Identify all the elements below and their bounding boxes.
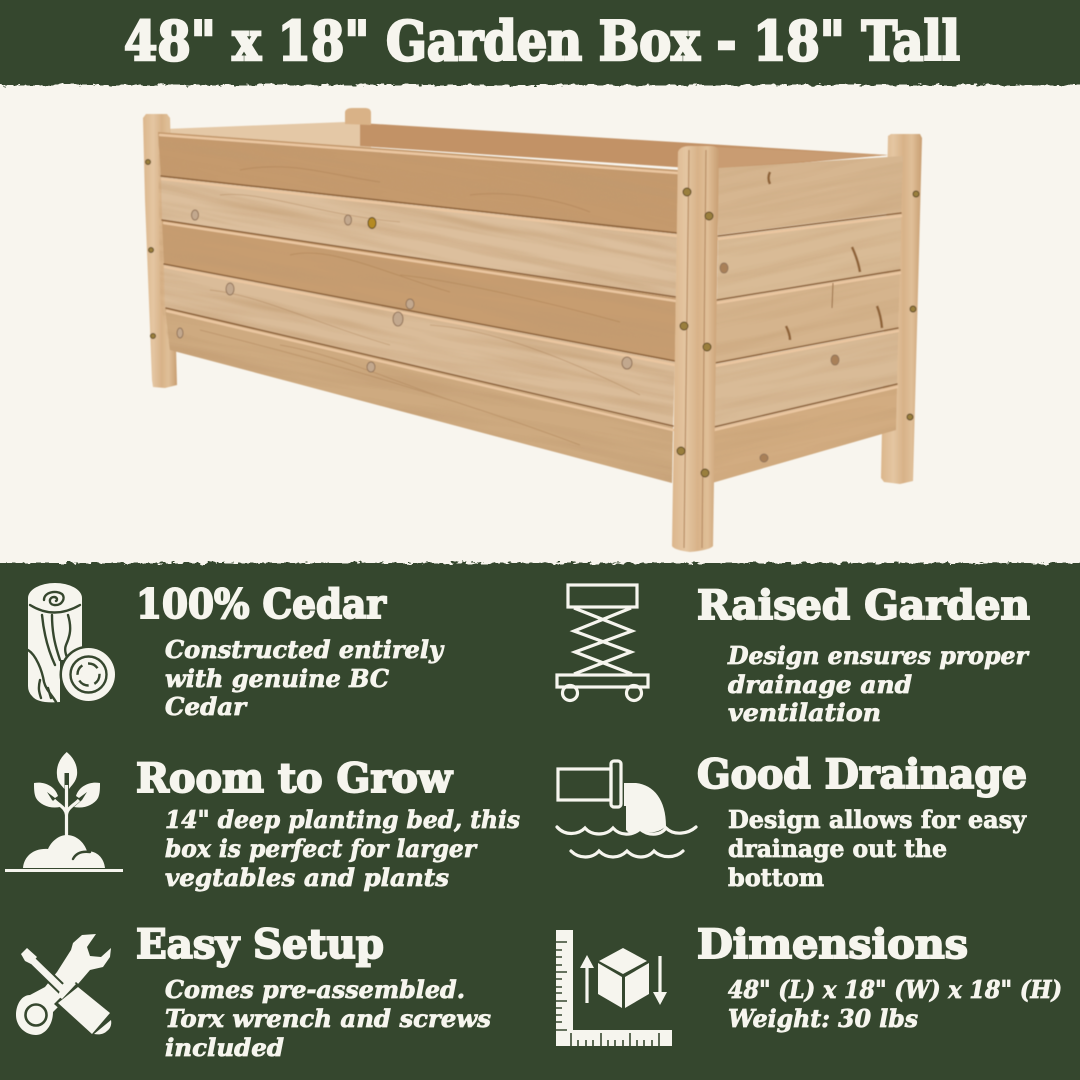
board seam (832, 283, 833, 308)
text: dimensions and weight: Weight: 30 lbs (728, 1004, 918, 1033)
knots: dark streaks (768, 172, 882, 340)
text: cedar description: Constructed entirely (165, 635, 445, 664)
panel: header band (0, 0, 1080, 85)
photo: cedar planter box (142, 107, 923, 552)
text: cedar description (165, 635, 445, 721)
text: room to grow description (165, 805, 520, 892)
text: drainage description: drainage out the (728, 834, 947, 863)
text: dimensions and weight: 48" (L) x 18" (W) x 18" (H) (728, 975, 1062, 1004)
text: dimensions and weight (728, 975, 1062, 1033)
board edges (160, 135, 901, 430)
heading: Dimensions: Dimensions (697, 921, 968, 968)
title: 48" x 18" Garden Box - 18" Tall (124, 9, 960, 73)
post groove (684, 150, 706, 548)
left post (143, 114, 177, 388)
back post (345, 108, 371, 125)
text: room to grow description: vegtables and plants (165, 863, 449, 892)
icon: cedar logs (28, 583, 118, 704)
text: cedar description: Cedar (165, 692, 248, 721)
text: cedar description: with genuine BC (165, 664, 389, 693)
text: drainage description: Design allows for easy (728, 805, 1027, 834)
text: raised garden description (727, 641, 1030, 727)
text: setup description: included (165, 1033, 284, 1062)
heading: Room to Grow: Room to Grow (136, 755, 454, 802)
text: room to grow description: 14" deep planting bed, this (165, 805, 520, 834)
brass plug (368, 218, 376, 228)
heading: Raised Garden: Raised Garden (697, 582, 1030, 629)
heading: Good Drainage: Good Drainage (697, 751, 1027, 798)
text: room to grow description: box is perfect for larger (165, 834, 478, 863)
icon: dimensions box and ruler (556, 930, 672, 1046)
icon: sprout (5, 752, 123, 872)
front panel boards (158, 132, 678, 234)
text: raised garden description: ventilation (728, 698, 881, 727)
text: drainage description (728, 805, 1027, 892)
text: setup description: Comes pre-assembled. (165, 975, 465, 1004)
text: raised garden description: drainage and (728, 670, 912, 699)
icon: scissor lift (557, 585, 648, 700)
heading: Easy Setup: Easy Setup (136, 921, 384, 968)
knots (177, 210, 839, 462)
screws (146, 160, 919, 477)
text: drainage description: bottom (728, 863, 824, 892)
heading: 100% Cedar: 100% Cedar (136, 581, 387, 628)
front corner post (672, 146, 719, 552)
text: raised garden description: Design ensures proper (727, 641, 1030, 670)
interior walls (165, 122, 371, 150)
text: setup description (165, 975, 491, 1062)
side panel boards (718, 156, 903, 235)
icon: drain pipe (557, 761, 696, 857)
grain lines (200, 167, 640, 445)
right rear post (881, 134, 922, 484)
icon: wrench and screwdriver (16, 934, 112, 1038)
text: setup description: Torx wrench and screws (165, 1004, 491, 1033)
panel: features background (0, 563, 1080, 1080)
wood grain (159, 183, 676, 416)
